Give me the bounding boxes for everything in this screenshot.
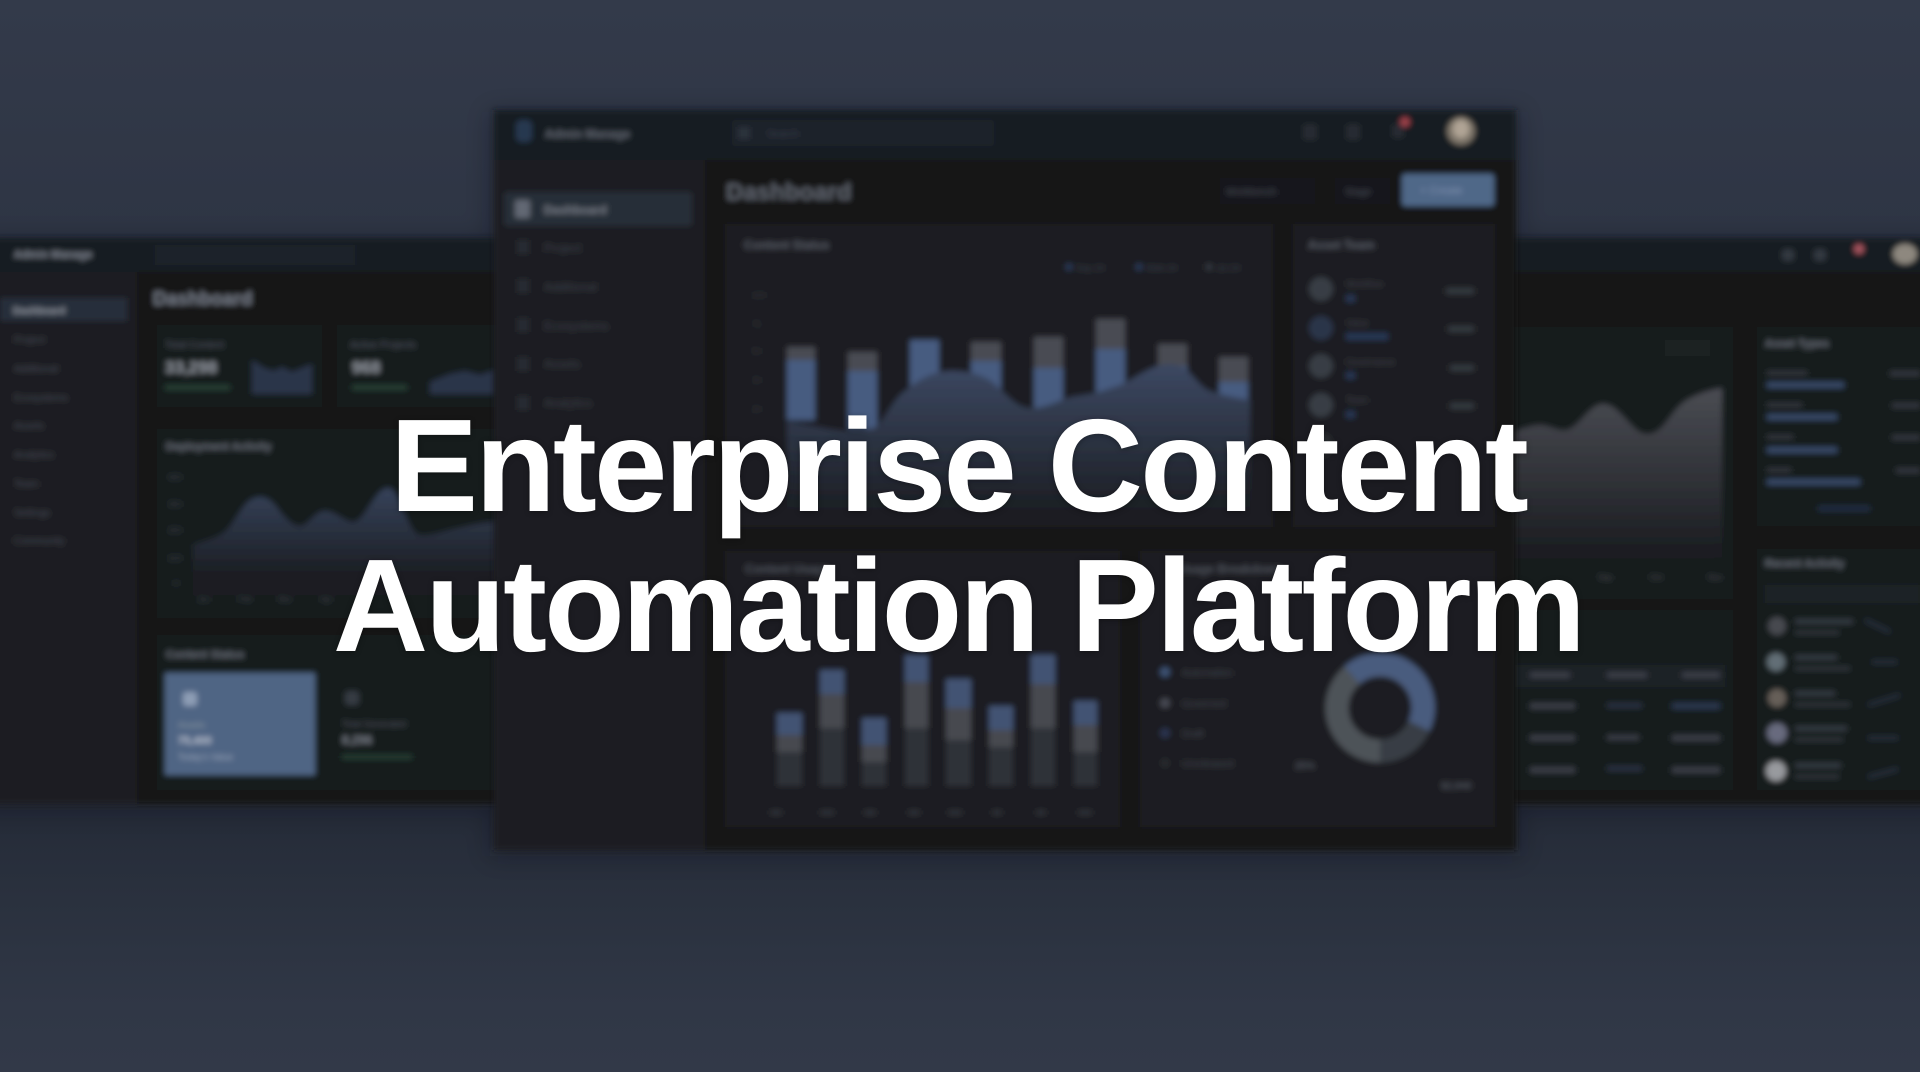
right area chart: Sep	[1598, 573, 1613, 582]
right area chart: Nov	[1708, 573, 1722, 582]
center dashboard window	[494, 110, 1516, 850]
panel: asset team list: Value	[1346, 318, 1368, 328]
right usage panel: Asset Types	[1765, 338, 1829, 350]
left metrics panel	[157, 635, 497, 790]
donut callouts	[1295, 761, 1472, 792]
panel: asset team list	[1293, 224, 1495, 527]
left heading: Dashboard	[153, 289, 252, 310]
left stat card 1	[157, 325, 322, 407]
panel: asset team list: Asset Team	[1308, 238, 1374, 252]
panel: stacked bar chart	[725, 551, 1120, 827]
right top bar	[1500, 238, 1920, 272]
left sidebar	[0, 272, 137, 804]
center sidebar: Assets	[544, 357, 580, 371]
panel: asset team list: Team	[1346, 395, 1368, 405]
center sidebar: Ecosystems	[544, 319, 609, 333]
header buttons: Stage	[1345, 187, 1372, 198]
panel: donut chart	[1140, 551, 1495, 827]
panel: asset team list: Governance	[1346, 357, 1395, 367]
left area chart: 0	[174, 579, 179, 588]
chart legend	[1066, 263, 1240, 273]
left sidebar: Community	[14, 536, 65, 547]
stacked bars	[787, 319, 1248, 429]
left sidebar: Assets	[14, 421, 44, 432]
left second metric	[342, 691, 412, 759]
chart legend: Jul 24	[1216, 263, 1240, 273]
panel: content status chart	[725, 224, 1273, 527]
left blue card: 75,400	[178, 735, 212, 747]
donut callouts: $2,840	[1441, 781, 1472, 792]
center heading: Dashboard	[726, 179, 851, 206]
left sidebar: Ecosystems	[14, 393, 68, 404]
y axis labels: 20	[752, 405, 761, 414]
header buttons: + Create	[1420, 185, 1462, 197]
panel: stacked bar chart: Content Usage	[745, 562, 830, 576]
area overlay	[787, 364, 1250, 520]
left sidebar: Team	[14, 479, 38, 490]
left metrics panel: Content Status	[166, 649, 244, 661]
left sidebar: Analytics	[14, 450, 54, 461]
donut ring	[1337, 664, 1423, 751]
left blue card	[165, 673, 315, 775]
left area chart: Deployment Activity	[166, 441, 272, 453]
left top bar: Admin Manage	[14, 249, 92, 261]
y axis labels: 30	[752, 376, 761, 385]
donut legend	[1160, 667, 1233, 770]
right area chart	[1500, 327, 1733, 599]
center sidebar: Dashboard	[544, 203, 607, 217]
left blue card: Today's Value	[178, 752, 233, 762]
y axis labels: 75	[752, 320, 761, 329]
left second metric: 8,296	[342, 733, 372, 747]
y axis labels: 50	[752, 347, 761, 356]
left area chart: 400	[168, 473, 182, 482]
left second metric: Total Generated	[342, 719, 406, 729]
donut legend: Automation	[1182, 668, 1233, 679]
left area chart: 200	[168, 526, 182, 535]
window shadows	[0, 112, 1920, 856]
chart legend: Sep 24	[1076, 263, 1105, 273]
center main background	[705, 160, 1516, 850]
panel: donut chart: Usage Breakdown	[1178, 562, 1282, 576]
left area chart: Feb	[238, 595, 252, 604]
logo and product name	[516, 120, 631, 142]
donut callouts: 25%	[1295, 761, 1315, 772]
right usage panel	[1757, 327, 1920, 526]
right lower table	[1500, 610, 1733, 790]
left area chart: Mar	[278, 595, 292, 604]
center sidebar	[494, 160, 705, 850]
top bar icons	[1303, 117, 1475, 145]
header buttons: Workbench	[1226, 187, 1276, 198]
logo and product name: Admin Manage	[545, 127, 631, 141]
left stat card 2: 968	[352, 358, 380, 377]
panel: asset team list: Workflow	[1346, 279, 1383, 289]
left sidebar: Settings	[14, 508, 50, 519]
right area chart: Oct	[1650, 573, 1663, 582]
header buttons	[1220, 174, 1494, 206]
center sidebar: Analytics	[544, 396, 592, 410]
title: Automation Platform	[333, 532, 1583, 679]
panel: content status chart: Content Status	[744, 238, 830, 252]
left sidebar: Project	[14, 335, 45, 346]
bars dark base	[777, 728, 1097, 786]
left stat card 1: 33,298	[165, 358, 217, 377]
left stat card 1: Total Content	[165, 340, 224, 351]
search box	[732, 120, 994, 146]
left sidebar: Dashboard	[13, 306, 65, 317]
left stat card 2: Active Projects	[350, 340, 416, 351]
bars gray middle	[777, 682, 1097, 762]
left area chart: 100	[168, 554, 182, 563]
left top bar	[0, 238, 500, 272]
right documents panel	[1757, 549, 1920, 790]
donut legend: Governed	[1182, 699, 1226, 710]
center sidebar: Project	[544, 241, 582, 255]
title: Enterprise Content	[390, 392, 1526, 539]
right dashboard window	[1500, 238, 1920, 804]
left stat card 2	[337, 325, 507, 407]
center top bar	[494, 110, 1516, 160]
left area chart: 300	[168, 500, 182, 509]
left blue card: Assets	[178, 720, 206, 730]
donut legend: Draft	[1182, 729, 1204, 740]
donut legend: Unreleased	[1182, 759, 1233, 770]
left dashboard window	[0, 238, 507, 804]
chart legend: Web 24	[1146, 263, 1177, 273]
left area chart: Jan	[197, 595, 210, 604]
y axis labels	[752, 291, 766, 414]
left sidebar: Additional	[14, 364, 58, 375]
y axis labels: 100	[752, 291, 766, 300]
bars blue top	[777, 655, 1097, 745]
left area chart: Apr	[320, 595, 333, 604]
search box: Search	[767, 129, 799, 140]
left area chart	[157, 429, 497, 618]
center sidebar: Additional	[544, 280, 597, 294]
right documents panel: Recent Activity	[1765, 558, 1845, 570]
